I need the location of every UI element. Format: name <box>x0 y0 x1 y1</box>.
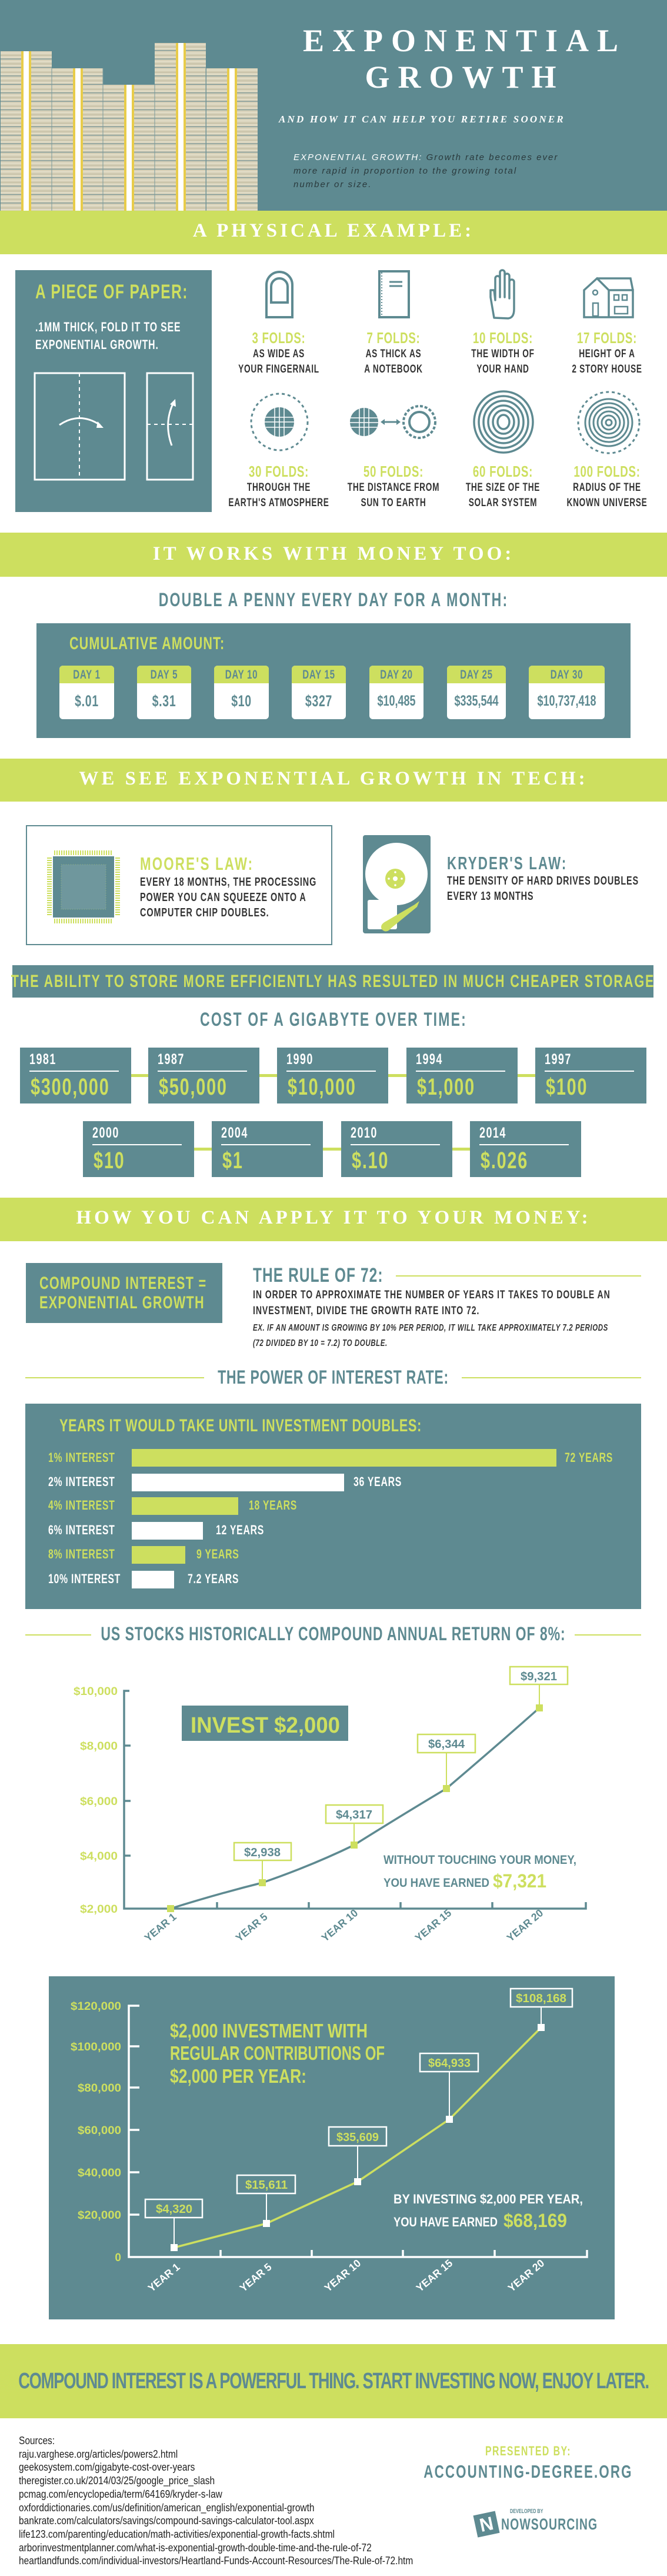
panel: regular contributions chart: REGULAR CONTRIBUTIONS OF <box>170 2042 385 2064</box>
kryder title: KRYDER'S LAW: <box>447 853 568 873</box>
100 folds: KNOWN UNIVERSE <box>566 497 648 509</box>
definition: number or size. <box>294 180 372 190</box>
icon: solar system <box>473 390 534 454</box>
sources: heartlandfunds.com/individual-investors/Heartland-Funds-Account-Resources/The-Rule-of-72.htm <box>19 2555 413 2567</box>
sources: oxforddictionaries.com/us/definition/american_english/exponential-growth <box>19 2502 315 2514</box>
30 folds: 30 FOLDS: <box>249 463 309 480</box>
text: DAY 5 <box>151 668 178 682</box>
100 folds: 100 FOLDS: <box>573 463 641 480</box>
3 folds <box>238 329 319 375</box>
gigabyte cost timeline: $.026 <box>481 1148 528 1174</box>
paper text: EXPONENTIAL GROWTH. <box>35 337 159 352</box>
panel: regular contributions chart: YOU HAVE EARNED <box>393 2215 498 2229</box>
moore text: COMPUTER CHIP DOUBLES. <box>140 906 269 919</box>
sources <box>19 2435 413 2567</box>
rule text: INVESTMENT, DIVIDE THE GROWTH RATE INTO 72. <box>253 1304 479 1317</box>
sources: raju.varghese.org/articles/powers2.html <box>19 2448 178 2460</box>
rule example: (72 DIVIDED BY 10 = 7.2) TO DOUBLE. <box>253 1338 388 1348</box>
panel: regular contributions chart: $35,609 <box>336 2131 379 2144</box>
gigabyte cost timeline: 2000 <box>92 1125 119 1141</box>
sources: Sources: <box>19 2435 55 2447</box>
60 folds: SOLAR SYSTEM <box>469 497 537 509</box>
rule text: IN ORDER TO APPROXIMATE THE NUMBER OF YEARS IT TAKES TO DOUBLE AN <box>253 1288 611 1301</box>
panel: regular contributions chart: $2,000 INVESTMENT WITH <box>170 2020 368 2042</box>
50 folds <box>347 463 439 509</box>
panel: regular contributions chart: $20,000 <box>78 2209 121 2222</box>
gigabyte cost timeline: $50,000 <box>159 1074 228 1100</box>
title <box>303 23 626 95</box>
icon: hand <box>489 269 515 320</box>
line chart: invest $2,000: $6,344 <box>428 1738 465 1751</box>
timeline connectors <box>20 1074 646 1077</box>
line chart: invest $2,000: $4,317 <box>336 1809 372 1822</box>
kryder text <box>447 875 639 903</box>
heading: money too <box>0 533 667 577</box>
presented by: PRESENTED BY: <box>485 2444 571 2458</box>
accounting-degree.org: ACCOUNTING-DEGREE.ORG <box>423 2461 633 2482</box>
closing banner <box>0 2344 667 2418</box>
heading: tech <box>0 759 667 802</box>
icon: house <box>583 277 634 318</box>
gigabyte cost timeline: 1994 <box>416 1051 443 1068</box>
icon: universe <box>578 391 640 454</box>
bar chart title: YEARS IT WOULD TAKE UNTIL INVESTMENT DOUBLES: <box>59 1416 422 1435</box>
bar chart: 6% INTEREST <box>48 1523 115 1537</box>
gigabyte cost timeline: $1,000 <box>417 1074 475 1100</box>
7 folds: A NOTEBOOK <box>364 363 423 375</box>
panel: regular contributions chart: $120,000 <box>71 2000 121 2013</box>
bar chart: 4% INTEREST <box>48 1498 115 1513</box>
bar chart: 12 YEARS <box>216 1523 264 1537</box>
compound interest box: EXPONENTIAL GROWTH <box>39 1293 205 1312</box>
kryder text: EVERY 13 MONTHS <box>447 890 533 903</box>
line chart: invest $2,000: YEAR 1 <box>142 1911 179 1944</box>
text: DAY 15 <box>302 668 335 682</box>
paper text <box>35 320 181 352</box>
line chart: invest $2,000: YEAR 20 <box>505 1907 545 1944</box>
panel: regular contributions chart: $2,000 PER YEAR: <box>170 2065 306 2087</box>
panel: regular contributions chart: YEAR 10 <box>322 2257 363 2294</box>
kryder text: THE DENSITY OF HARD DRIVES DOUBLES <box>447 875 639 888</box>
30 folds: THROUGH THE <box>247 481 311 494</box>
storage banner: THE ABILITY TO STORE MORE EFFICIENTLY HAS RESULTED IN MUCH CHEAPER STORAGE <box>11 972 655 991</box>
bar chart: 36 YEARS <box>353 1474 402 1489</box>
moore title: MOORE'S LAW: <box>140 853 254 874</box>
compound interest box: COMPOUND INTEREST = <box>39 1274 206 1293</box>
panel: regular contributions chart: YEAR 1 <box>146 2261 182 2294</box>
panel: regular contributions chart: $68,169 <box>503 2210 567 2231</box>
line chart: invest $2,000: INVEST $2,000 <box>191 1713 340 1738</box>
60 folds: THE SIZE OF THE <box>466 481 540 494</box>
gigabyte cost timeline <box>20 1048 646 1177</box>
bar chart: 72 YEARS <box>565 1450 613 1465</box>
panel: moore's law <box>26 825 332 945</box>
line chart: invest $2,000: WITHOUT TOUCHING YOUR MONEY, <box>383 1853 576 1867</box>
definition <box>294 152 558 190</box>
30 folds <box>228 463 329 509</box>
line chart: invest $2,000: $9,321 <box>521 1670 557 1683</box>
gigabyte cost timeline: $1 <box>222 1148 244 1174</box>
logo: nowsourcing: N <box>478 2512 495 2536</box>
panel: regular contributions chart: $80,000 <box>78 2082 121 2095</box>
panel: bar chart years to double <box>25 1404 641 1609</box>
gigabyte cost timeline: $300,000 <box>31 1074 110 1100</box>
text: $10,485 <box>377 693 416 709</box>
bar chart: 2% INTEREST <box>48 1474 115 1489</box>
text: $335,544 <box>454 693 499 709</box>
sources: arborinvestmentplanner.com/what-is-exponential-growth-double-time-and-the-rule-of-72 <box>19 2542 372 2554</box>
panel: regular contributions chart: $15,611 <box>245 2179 288 2192</box>
line chart: invest $2,000 <box>74 1666 587 1944</box>
heading: us stocks: US STOCKS HISTORICALLY COMPOUND ANNUAL RETURN OF 8%: <box>101 1623 566 1644</box>
icon: notebook <box>378 270 410 318</box>
gigabyte cost timeline: $.10 <box>352 1148 389 1174</box>
10 folds: YOUR HAND <box>476 363 529 375</box>
heading: apply to money <box>0 1198 667 1241</box>
moore text <box>140 876 316 919</box>
sources: geekosystem.com/gigabyte-cost-over-years <box>19 2461 195 2473</box>
paper heading: A PIECE OF PAPER: <box>35 281 188 303</box>
text: DAY 20 <box>380 668 413 682</box>
text: $327 <box>305 692 332 710</box>
definition: more rapid in proportion to the growing total <box>294 166 517 176</box>
heading: apply to money: HOW YOU CAN APPLY IT TO YOUR MONEY: <box>76 1207 591 1228</box>
7 folds <box>364 329 423 375</box>
subtitle: cost of a gigabyte: COST OF A GIGABYTE OVER TIME: <box>200 1009 467 1030</box>
100 folds: RADIUS OF THE <box>573 481 641 494</box>
line chart: invest $2,000: YEAR 10 <box>319 1907 360 1944</box>
sources: theregister.co.uk/2014/03/25/google_price_slash <box>19 2475 215 2487</box>
day cards: DAY 1 <box>73 668 101 682</box>
gigabyte cost timeline: 2004 <box>221 1125 248 1141</box>
icons grid: folds <box>228 269 648 509</box>
line chart: invest $2,000: $2,938 <box>244 1846 281 1859</box>
rule of 72 <box>253 1264 641 1348</box>
subtitle: AND HOW IT CAN HELP YOU RETIRE SOONER <box>279 114 565 125</box>
logo: nowsourcing <box>473 2508 598 2538</box>
50 folds: SUN TO EARTH <box>361 497 426 509</box>
10 folds <box>471 329 535 375</box>
logo: nowsourcing: DEVELOPED BY <box>510 2508 543 2515</box>
line chart: invest $2,000: $6,000 <box>80 1796 118 1808</box>
storage banner <box>12 965 653 998</box>
panel: regular contributions chart: $4,320 <box>156 2203 192 2216</box>
60 folds <box>466 463 540 509</box>
sources: bankrate.com/calculators/savings/compound-savings-calculator-tool.aspx <box>19 2515 314 2527</box>
panel: regular contributions chart: $108,168 <box>516 1992 566 2005</box>
rule text <box>253 1288 611 1317</box>
text: DAY 30 <box>551 668 583 682</box>
heading: a physical example: A PHYSICAL EXAMPLE: <box>193 220 474 241</box>
bar chart: 7.2 YEARS <box>188 1571 239 1586</box>
panel: regular contributions chart <box>49 1976 615 2319</box>
gigabyte cost timeline: 1990 <box>286 1051 314 1068</box>
17 folds: 2 STORY HOUSE <box>572 363 642 375</box>
moore text: EVERY 18 MONTHS, THE PROCESSING <box>140 876 316 889</box>
panel: regular contributions chart: YEAR 5 <box>238 2261 274 2294</box>
heading: tech: WE SEE EXPONENTIAL GROWTH IN TECH: <box>79 768 588 789</box>
17 folds <box>572 329 642 375</box>
icon: chip <box>47 850 120 923</box>
line chart: invest $2,000: YEAR 15 <box>413 1907 453 1944</box>
gigabyte cost timeline: $100 <box>546 1074 588 1100</box>
header panel <box>0 0 667 211</box>
3 folds: AS WIDE AS <box>253 348 305 360</box>
cumulative heading: CUMULATIVE AMOUNT: <box>69 634 225 653</box>
gigabyte cost timeline: 1981 <box>29 1051 56 1068</box>
rule example <box>253 1323 608 1348</box>
definition: EXPONENTIAL GROWTH: Growth rate becomes ever <box>294 152 558 162</box>
icon: hard drive <box>363 835 431 933</box>
bar chart: 18 YEARS <box>249 1498 297 1513</box>
7 folds: AS THICK AS <box>366 348 421 360</box>
line chart: invest $2,000: $8,000 <box>80 1740 118 1753</box>
moore text: POWER YOU CAN SQUEEZE ONTO A <box>140 891 306 904</box>
subtitle: double a penny: DOUBLE A PENNY EVERY DAY FOR A MONTH: <box>159 589 508 610</box>
text: $.31 <box>152 692 176 710</box>
text: DAY 25 <box>460 668 493 682</box>
7 folds: 7 FOLDS: <box>366 329 421 347</box>
panel: regular contributions chart: YEAR 15 <box>414 2257 455 2294</box>
icon: earth atmosphere <box>251 393 308 451</box>
bar chart <box>48 1449 613 1588</box>
icon: folding paper <box>34 372 194 480</box>
gigabyte cost timeline: 2014 <box>479 1125 506 1141</box>
panel: regular contributions chart: $40,000 <box>78 2167 121 2179</box>
title: EXPONENTIAL <box>303 23 626 58</box>
30 folds: EARTH'S ATMOSPHERE <box>228 497 329 509</box>
title: GROWTH <box>365 59 565 95</box>
money stacks illustration <box>1 43 258 211</box>
gigabyte cost timeline: $10,000 <box>288 1074 356 1100</box>
line chart: invest $2,000: $4,000 <box>80 1850 118 1863</box>
50 folds: THE DISTANCE FROM <box>348 481 439 494</box>
17 folds: HEIGHT OF A <box>579 348 635 360</box>
rule title: THE RULE OF 72: <box>253 1264 383 1287</box>
3 folds: 3 FOLDS: <box>252 329 306 347</box>
bar chart: 1% INTEREST <box>48 1450 115 1465</box>
100 folds <box>566 463 648 509</box>
line chart: invest $2,000: YEAR 5 <box>234 1911 270 1944</box>
heading: a physical example <box>0 211 667 254</box>
10 folds: THE WIDTH OF <box>471 348 535 360</box>
panel: regular contributions chart: YEAR 20 <box>506 2257 546 2294</box>
text: $10,737,418 <box>537 693 596 709</box>
heading: money too: IT WORKS WITH MONEY TOO: <box>153 543 514 564</box>
day cards <box>59 666 114 719</box>
bar chart: 9 YEARS <box>196 1547 239 1561</box>
line chart: invest $2,000: $7,321 <box>493 1870 546 1892</box>
panel: cumulative amount <box>36 623 631 738</box>
line chart: invest $2,000: YOU HAVE EARNED <box>383 1876 489 1890</box>
logo: nowsourcing: NOWSOURCING <box>501 2515 598 2533</box>
line chart: invest $2,000: $10,000 <box>74 1686 118 1698</box>
closing banner: COMPOUND INTEREST IS A POWERFUL THING. START INVESTING NOW, ENJOY LATER. <box>18 2369 649 2394</box>
rule example: EX. IF AN AMOUNT IS GROWING BY 10% PER PERIOD, IT WILL TAKE APPROXIMATELY 7.2 PERIODS <box>253 1323 608 1333</box>
panel: regular contributions chart: $100,000 <box>71 2041 121 2053</box>
gigabyte cost timeline: $10 <box>94 1148 125 1174</box>
17 folds: 17 FOLDS: <box>577 329 637 347</box>
panel: regular contributions chart: BY INVESTING $2,000 PER YEAR, <box>393 2192 583 2206</box>
gigabyte cost timeline: 1987 <box>158 1051 185 1068</box>
text: $10 <box>231 692 252 710</box>
icon: fingernail <box>265 271 294 318</box>
bar chart: 10% INTEREST <box>48 1571 121 1586</box>
panel: regular contributions chart: $60,000 <box>78 2125 121 2137</box>
icon: earth to sun <box>350 405 436 439</box>
bar chart: 8% INTEREST <box>48 1547 115 1561</box>
sources: pcmag.com/encyclopedia/term/64169/kryder-s-law <box>19 2488 222 2500</box>
10 folds: 10 FOLDS: <box>473 329 533 347</box>
gigabyte cost timeline: 2010 <box>351 1125 378 1141</box>
line chart: invest $2,000: $2,000 <box>80 1903 118 1916</box>
panel: regular contributions chart: 0 <box>115 2252 121 2264</box>
gigabyte cost timeline: 1997 <box>545 1051 572 1068</box>
3 folds: YOUR FINGERNAIL <box>238 363 319 375</box>
50 folds: 50 FOLDS: <box>363 463 423 480</box>
panel: piece of paper <box>15 270 212 512</box>
text: DAY 10 <box>225 668 258 682</box>
panel: regular contributions chart: $64,933 <box>428 2057 471 2070</box>
paper text: .1MM THICK, FOLD IT TO SEE <box>35 320 181 334</box>
compound interest box <box>26 1263 222 1323</box>
sources: life123.com/parenting/education/math-activities/exponential-growth-facts.shtml <box>19 2528 335 2540</box>
day cards: $.01 <box>75 692 99 710</box>
heading: power of interest rate: THE POWER OF INTEREST RATE: <box>218 1367 449 1388</box>
60 folds: 60 FOLDS: <box>473 463 533 480</box>
